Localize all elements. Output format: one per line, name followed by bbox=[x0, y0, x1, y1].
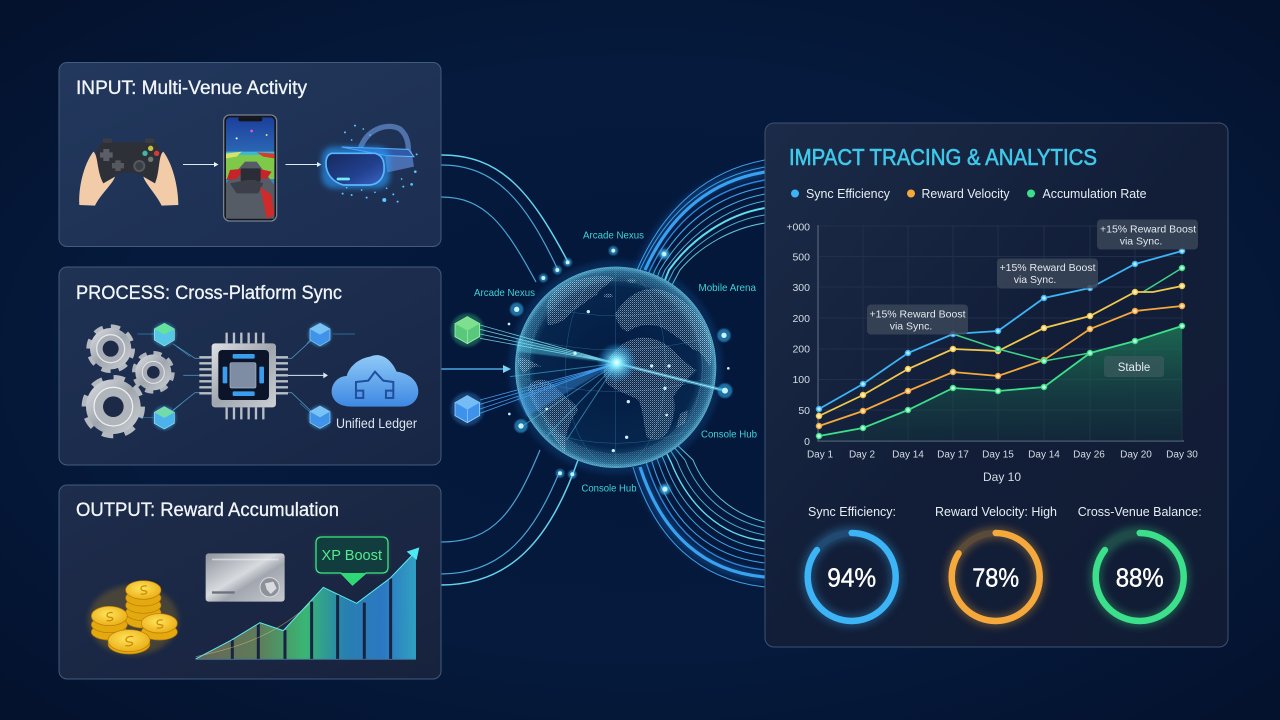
heading: process: PROCESS: Cross-Platform Sync bbox=[76, 283, 342, 304]
icon: processor chip with connectors bbox=[173, 333, 328, 419]
icon: green cube bbox=[451, 313, 484, 347]
labels: network venues: Console Hub bbox=[582, 482, 637, 494]
axis: y labels: 100 bbox=[792, 374, 810, 386]
icon: gamepad in hands bbox=[79, 138, 178, 206]
axis: y labels: 200 bbox=[792, 344, 810, 356]
panel: output bbox=[59, 485, 441, 679]
labels: network venues: Arcade Nexus bbox=[583, 230, 644, 242]
callout: boost three: +15% Reward Boost bbox=[1100, 224, 1196, 236]
labels: network venues: Arcade Nexus bbox=[474, 287, 535, 299]
axis: x labels: Day 15 bbox=[982, 450, 1014, 460]
series: accumulation rate bbox=[816, 266, 1184, 438]
flow lines: output to globe bbox=[441, 450, 578, 585]
axis: x labels: Day 30 bbox=[1166, 450, 1198, 460]
heading: output: OUTPUT: Reward Accumulation bbox=[76, 500, 339, 521]
labels: network venues bbox=[474, 230, 757, 494]
icon: silver card bbox=[206, 553, 285, 602]
area: accumulation fill bbox=[819, 326, 1182, 441]
heading: input: INPUT: Multi-Venue Activity bbox=[76, 78, 307, 99]
gauge: reward velocity bbox=[935, 505, 1057, 621]
legend: Sync Efficiency bbox=[806, 187, 891, 201]
axis title: Day 10 bbox=[983, 470, 1021, 484]
axis: x labels: Day 17 bbox=[937, 450, 969, 460]
beams: cube links to hub bbox=[480, 325, 725, 440]
flow bundle: globe to analytics top bbox=[637, 160, 765, 300]
callout: boost three: via Sync. bbox=[1120, 236, 1162, 248]
label: unified ledger: Unified Ledger bbox=[336, 416, 417, 431]
globe bbox=[480, 246, 732, 494]
flow line: process to globe bbox=[441, 365, 511, 373]
icon: cloud ledger bbox=[332, 355, 418, 407]
gauge: cross-venue balance: 88% bbox=[1116, 562, 1164, 592]
line chart bbox=[786, 220, 1198, 484]
callout: XP boost: XP Boost bbox=[322, 547, 383, 564]
icon: gold coins bbox=[88, 581, 178, 655]
series: accumulation secondary bbox=[953, 268, 1182, 361]
callout: boost two: +15% Reward Boost bbox=[999, 262, 1096, 274]
gauge: sync efficiency bbox=[808, 505, 896, 621]
icon: metal gears bbox=[86, 328, 171, 434]
gauge: reward velocity: 78% bbox=[972, 562, 1019, 592]
labels: network venues: Mobile Arena bbox=[698, 282, 756, 294]
axis: x labels: Day 26 bbox=[1073, 450, 1105, 460]
panel: process bbox=[59, 267, 441, 465]
gauge: reward velocity: Reward Velocity: High bbox=[935, 505, 1057, 519]
legend: Accumulation Rate bbox=[1042, 187, 1147, 201]
series: reward velocity lower bbox=[816, 304, 1184, 428]
axis: y labels: 50 bbox=[798, 405, 810, 417]
axis: x labels: Day 1 bbox=[807, 450, 833, 460]
gauge: sync efficiency: Sync Efficiency: bbox=[808, 505, 896, 519]
callout: boost three bbox=[1097, 220, 1198, 250]
axis: x labels: Day 14 bbox=[1028, 450, 1060, 460]
axis: x labels: Day 20 bbox=[1120, 450, 1152, 460]
gauge: cross-venue balance: Cross-Venue Balance: bbox=[1078, 505, 1202, 519]
callout: boost one: via Sync. bbox=[890, 320, 932, 332]
callout: boost two bbox=[997, 258, 1098, 288]
icon: data cubes bbox=[137, 323, 355, 430]
gauge: sync efficiency: 94% bbox=[827, 562, 876, 592]
icon: blue cube bbox=[451, 392, 484, 426]
axis: y labels: +000 bbox=[786, 222, 810, 234]
axis: y labels: 0 bbox=[804, 436, 810, 448]
axis: y labels bbox=[786, 222, 810, 448]
icon: phone with racing game bbox=[224, 115, 277, 221]
legend bbox=[791, 187, 1147, 201]
axis: y labels: 300 bbox=[792, 282, 810, 294]
callout: XP boost bbox=[316, 537, 388, 585]
arrow: phone to headset bbox=[286, 162, 322, 167]
callout: boost two: via Sync. bbox=[1014, 274, 1056, 286]
map: dotted continents bbox=[518, 276, 712, 452]
axis: y labels: 200 bbox=[792, 313, 810, 325]
axis: x labels: Day 2 bbox=[849, 450, 875, 460]
panel: analytics bbox=[765, 123, 1228, 647]
axis: x labels: Day 14 bbox=[892, 450, 924, 460]
chart: rising reward area bbox=[196, 547, 419, 660]
panel: input bbox=[59, 62, 441, 246]
series: reward velocity upper bbox=[816, 284, 1184, 418]
icon: VR headset bbox=[322, 125, 418, 203]
callout: boost one: +15% Reward Boost bbox=[869, 308, 966, 320]
axis: x labels bbox=[807, 450, 1198, 460]
axis: y labels: 500 bbox=[792, 252, 810, 264]
nodes: network points bbox=[508, 246, 732, 494]
arrow: gamepad to phone bbox=[183, 162, 218, 167]
heading: analytics: IMPACT TRACING & ANALYTICS bbox=[789, 144, 1097, 170]
gauge: cross-venue balance bbox=[1078, 505, 1202, 621]
callout: boost one bbox=[867, 304, 968, 334]
callout: stable bbox=[1104, 356, 1164, 377]
callout: stable: Stable bbox=[1118, 362, 1150, 374]
flow bundle: globe to analytics bottom bbox=[633, 440, 765, 587]
labels: network venues: Console Hub bbox=[701, 428, 757, 440]
flow lines: input to globe bbox=[441, 155, 568, 282]
series: sync efficiency bbox=[816, 248, 1184, 412]
legend: Reward Velocity bbox=[922, 187, 1010, 201]
